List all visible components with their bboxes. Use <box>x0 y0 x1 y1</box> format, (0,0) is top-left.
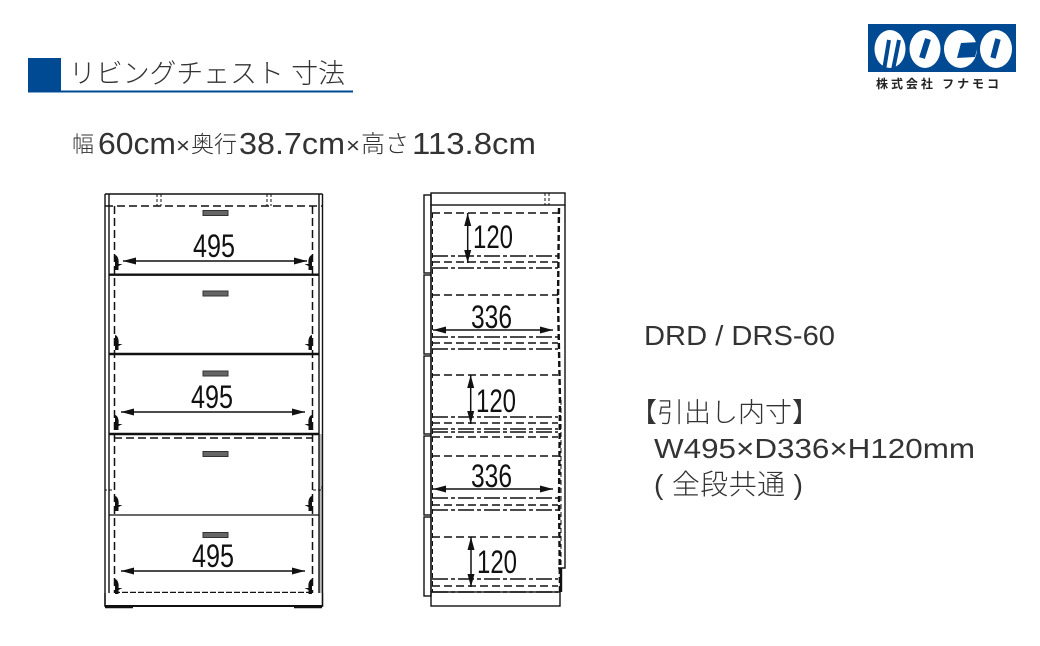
dimension: 495 <box>123 228 307 264</box>
cabinet body <box>431 193 565 606</box>
logo: moco <box>868 24 1016 91</box>
dimension: 336 <box>433 458 553 494</box>
overall dimensions text: 高さ <box>361 131 409 158</box>
drawer fronts <box>424 195 431 596</box>
overall dimensions text: 奥行 <box>191 131 237 157</box>
dimension: 495: 495 <box>191 379 233 415</box>
title: リビングチェスト 寸法 <box>69 59 345 89</box>
drawer runners <box>115 255 312 594</box>
overall dimensions text: 38.7cm <box>239 126 345 161</box>
overall dimensions text <box>72 126 536 161</box>
side view drawing <box>424 193 565 606</box>
dimension: 120: 120 <box>476 383 516 419</box>
dimension: 120: 120 <box>477 544 517 580</box>
drawer handles <box>203 210 228 538</box>
dimension: 120 <box>468 537 517 587</box>
dimension: 495 <box>121 379 305 416</box>
drawer inner dimensions: ( 全段共通 ) <box>654 469 803 500</box>
drawer inner dimensions: 【引出し内寸】 <box>630 398 819 428</box>
dimension: 336: 336 <box>471 458 512 494</box>
dimension: 495 <box>121 538 305 574</box>
hidden drawer lines <box>432 213 558 592</box>
overall dimensions text: × <box>176 133 190 158</box>
drawer dividers <box>109 275 319 434</box>
logo: moco: 株式会社 フナモコ <box>876 76 999 91</box>
cabinet frame <box>105 194 322 607</box>
dimension: 495: 495 <box>192 538 234 574</box>
overall dimensions text: 幅 <box>72 132 94 157</box>
dimension: 336: 336 <box>471 299 512 335</box>
dimension: 120: 120 <box>473 219 513 255</box>
overall dimensions text: × <box>346 133 360 158</box>
overall dimensions text: 60cm <box>98 126 176 161</box>
front view drawing <box>105 194 322 607</box>
dimension: 336 <box>433 299 553 335</box>
model number: DRD / DRS-60 <box>644 320 835 351</box>
dimension: 120 <box>464 213 513 263</box>
drawer inner dimensions: W495×D336×H120mm <box>654 433 975 464</box>
overall dimensions text: 113.8cm <box>412 126 536 161</box>
dimension: 120 <box>467 375 516 424</box>
drawer inner dimensions <box>630 398 975 500</box>
dimension: 495: 495 <box>193 228 235 264</box>
